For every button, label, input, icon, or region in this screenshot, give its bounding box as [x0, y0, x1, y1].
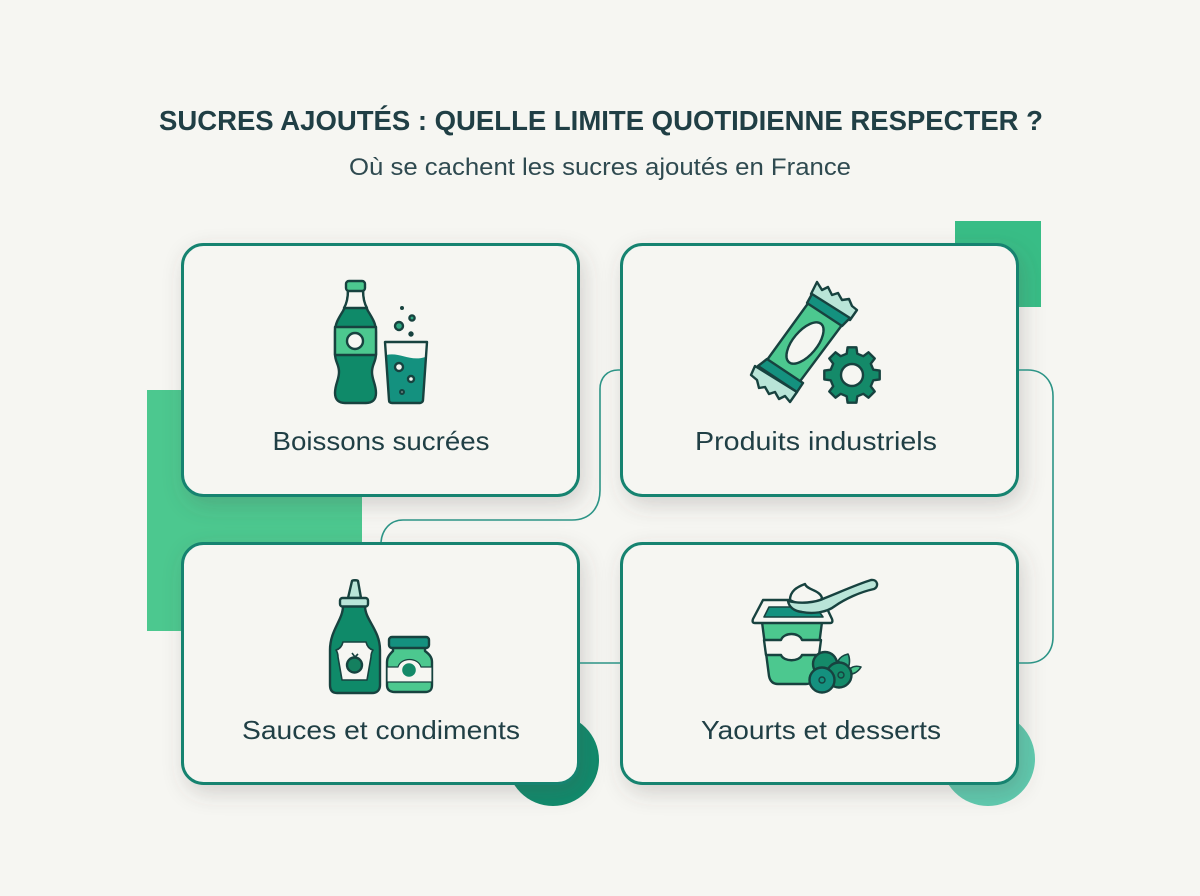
label: Yaourts et desserts [701, 715, 941, 745]
connectors [381, 370, 1053, 663]
label: Sauces et condiments [242, 715, 520, 745]
panel: Boissons sucrées [182, 244, 578, 496]
subtitle: Où se cachent les sucres ajoutés en France [349, 154, 851, 181]
decorative green rectangle left [147, 390, 362, 631]
panel: Yaourts et desserts [622, 544, 1018, 784]
title: SUCRES AJOUTÉS : QUELLE LIMITE QUOTIDIENNE RESPECTER ? [159, 105, 1043, 136]
label: Boissons sucrées [272, 426, 490, 456]
icon: snack bar and gear [751, 282, 880, 403]
decorative dark circle [507, 714, 599, 806]
icon: ketchup bottle and jar [330, 580, 432, 693]
decorative green square top right [955, 221, 1041, 307]
icon: yogurt, spoon and blueberries [753, 580, 877, 692]
icon: soda bottle and glass [335, 281, 427, 403]
panel: Sauces et condiments [182, 544, 578, 784]
panel: Produits industriels [622, 244, 1018, 496]
label: Produits industriels [695, 426, 937, 456]
decorative teal circle [941, 712, 1035, 806]
